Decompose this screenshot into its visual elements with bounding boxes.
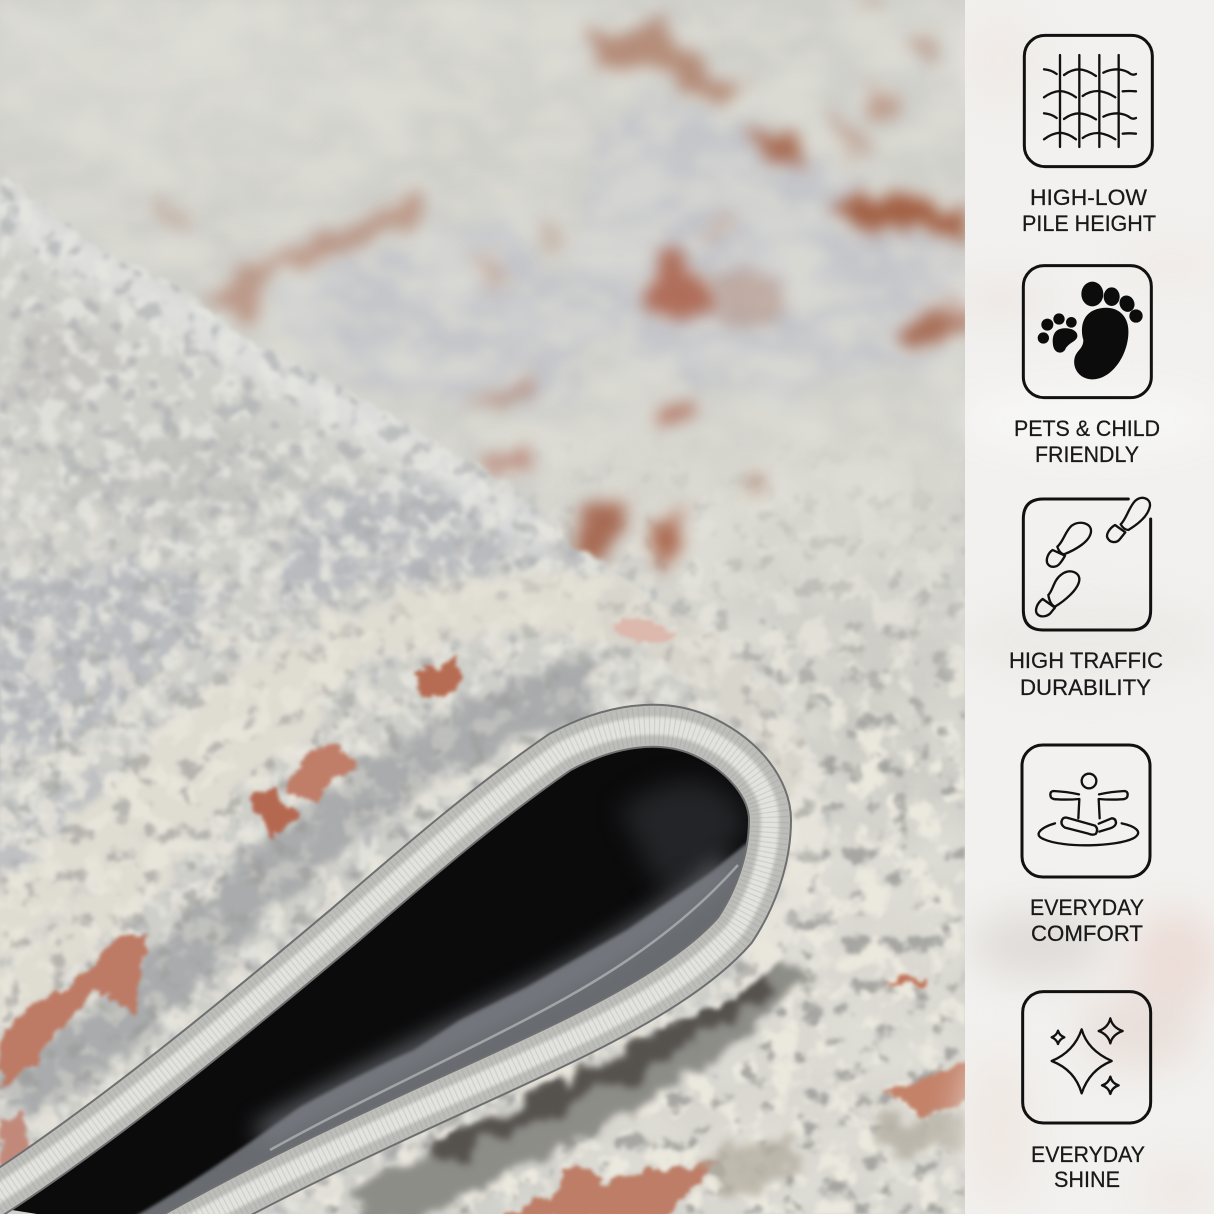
dark weave at the far end — [620, 781, 745, 890]
shadow under the roll — [360, 960, 790, 1214]
feature panel — [950, 0, 1214, 1214]
icon: paw and footprint — [1023, 266, 1151, 398]
label: pets and child friendly: FRIENDLY — [1035, 442, 1139, 467]
grey woven backing — [120, 830, 800, 1214]
binding edge — [0, 726, 770, 1214]
feature: everyday comfort — [1022, 745, 1150, 946]
rolled rug body — [0, 160, 850, 1214]
label: high traffic durability: HIGH TRAFFIC — [1009, 648, 1163, 673]
grey pile areas — [0, 324, 584, 876]
grey-blue blurred patches — [322, 108, 938, 396]
label: high traffic durability: DURABILITY — [1020, 675, 1151, 700]
backing seam — [270, 865, 738, 1150]
label: everyday shine: EVERYDAY — [1031, 1142, 1145, 1167]
sharp rust patches — [505, 977, 970, 1214]
feature: high-low pile height — [1022, 35, 1156, 236]
label: high-low pile height: PILE HEIGHT — [1022, 211, 1156, 236]
cream pile streaks — [0, 605, 808, 1010]
taupe pile patches — [700, 1110, 965, 1200]
icon: pile height grid — [1024, 35, 1152, 167]
label: everyday comfort: EVERYDAY — [1030, 895, 1144, 920]
shoe prints — [1036, 498, 1150, 616]
upper roll soft pile texture — [0, 160, 850, 1214]
label: pets and child friendly — [1014, 416, 1160, 467]
backing light centre — [260, 865, 725, 1135]
grey band above the binding — [10, 690, 590, 1100]
dark underside of the roll — [0, 690, 820, 1214]
feature: high traffic durability — [1009, 498, 1163, 700]
label: high-low pile height — [1022, 185, 1156, 236]
label: everyday shine: SHINE — [1054, 1167, 1120, 1192]
panel mottling — [950, 10, 1214, 1214]
roll rust accents — [0, 615, 675, 1170]
label: high-low pile height: HIGH-LOW — [1030, 185, 1147, 210]
light top edge of the roll — [0, 200, 550, 550]
icon: meditating figure — [1022, 745, 1150, 877]
label: everyday shine — [1031, 1142, 1145, 1192]
label: pets and child friendly: PETS & CHILD — [1014, 416, 1160, 441]
feature: pets and child friendly — [1014, 266, 1160, 467]
icon: footsteps — [1023, 498, 1151, 630]
label: high traffic durability — [1009, 648, 1163, 700]
label: everyday comfort: COMFORT — [1031, 921, 1143, 946]
icon: sparkles — [1023, 992, 1151, 1123]
feature: everyday shine — [1023, 992, 1151, 1192]
blurred rust patches — [150, 0, 965, 575]
background rust marks — [150, 0, 970, 1214]
label: everyday comfort — [1030, 895, 1144, 946]
